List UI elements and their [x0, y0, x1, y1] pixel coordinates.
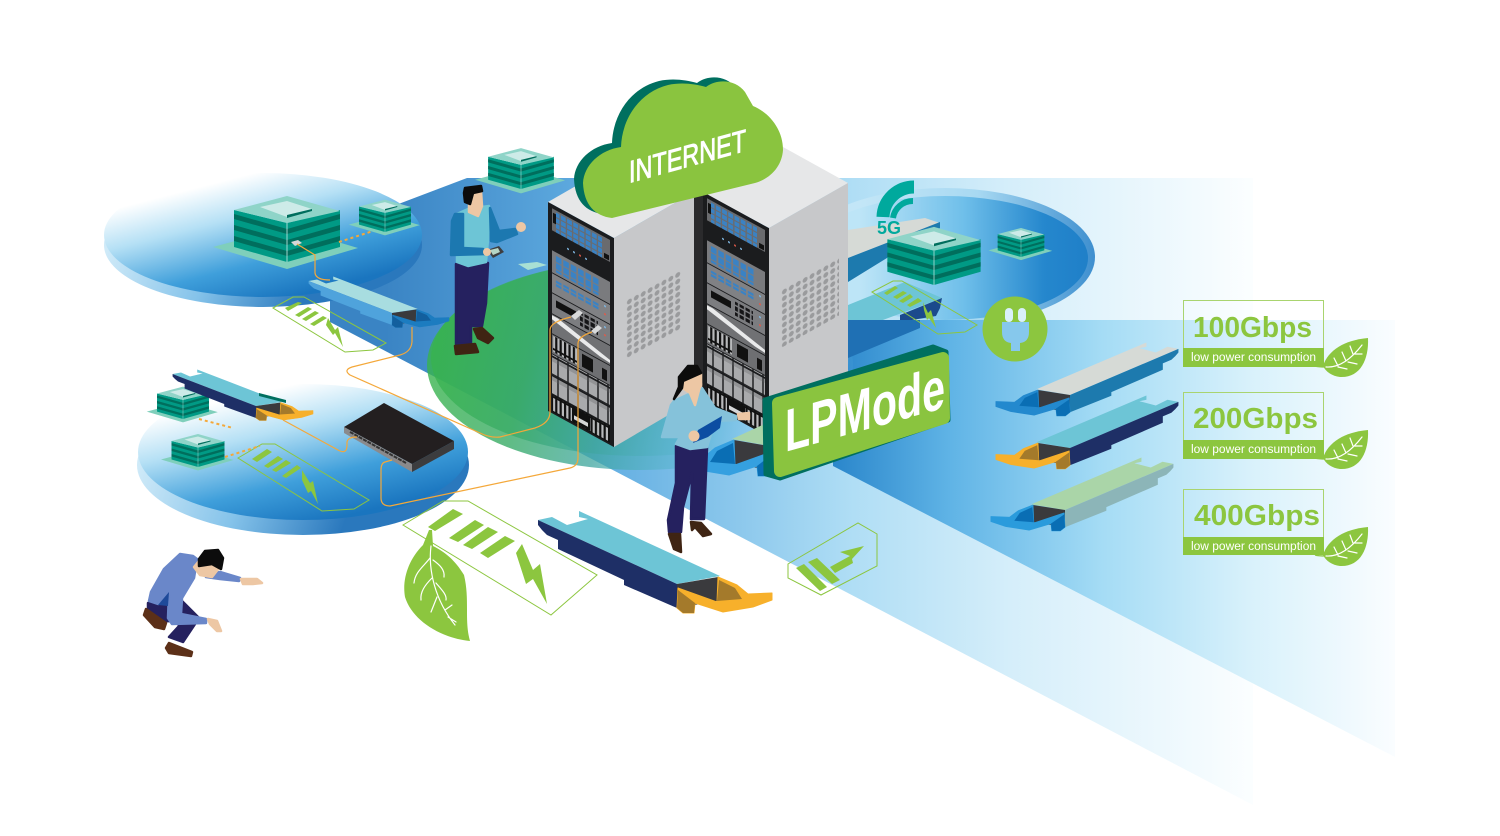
building: lower-left lower — [161, 434, 234, 470]
person: man with phone — [451, 186, 526, 354]
speed label: 100Gbps — [1183, 300, 1368, 377]
speed label: 100Gbps: 100Gbps — [1193, 312, 1312, 344]
server rack: right — [703, 147, 848, 437]
cloud with INTERNET label: INTERNET — [629, 122, 746, 190]
icon: low power tag, 5G area — [872, 281, 977, 334]
icon: low power tag, centre small — [788, 523, 877, 595]
building: lower-left upper — [147, 387, 218, 422]
building: above central disc — [475, 148, 565, 193]
small device plate — [518, 262, 547, 270]
fibre cables — [199, 231, 602, 506]
icon: low power tag, top-left — [273, 297, 386, 352]
cloud with INTERNET label — [574, 77, 783, 218]
building: right small — [988, 228, 1052, 260]
light beam: back panel — [330, 178, 1253, 805]
platform: central green disc — [427, 260, 853, 470]
strip on gold transceiver — [259, 393, 286, 403]
speed label: 400Gbps: low power consumption — [1191, 541, 1316, 553]
building: right large — [887, 227, 981, 285]
platform: top-left office disc — [104, 173, 422, 307]
building: top-left small — [349, 200, 420, 235]
icon: power plug — [982, 296, 1048, 362]
transceiver: 100Gbps — [996, 342, 1178, 416]
platform: right 5G disc — [795, 188, 1095, 326]
icon: low power tag, centre large — [403, 501, 597, 615]
light beam: front panel — [833, 320, 1395, 757]
transceiver behind 5G building — [848, 218, 942, 358]
network switch — [344, 403, 454, 472]
LPMode sign — [765, 347, 948, 478]
transceiver: 200Gbps — [996, 395, 1178, 469]
LPMode sign: LPMode — [785, 354, 945, 465]
icon: low power tag, lower-left — [238, 444, 369, 511]
speed label: 400Gbps — [1183, 490, 1368, 566]
transceiver: top-left light blue — [309, 276, 449, 328]
building: top-left large — [213, 196, 358, 269]
person: woman with tablet — [662, 366, 749, 552]
icon: 5G signal: 5G — [877, 218, 901, 238]
server rack: left — [548, 156, 704, 447]
icon: large leaf — [404, 530, 470, 641]
transceiver: centre large gold — [538, 511, 772, 613]
transceiver: 400Gbps — [991, 457, 1173, 531]
platform: lower-left office disc — [137, 384, 469, 535]
person: crouching man — [144, 550, 262, 656]
speed label: 100Gbps: low power consumption — [1191, 352, 1316, 364]
speed label: 200Gbps: 200Gbps — [1193, 403, 1318, 435]
speed label: 200Gbps — [1183, 392, 1368, 469]
transceiver: lower-left gold — [173, 370, 313, 420]
speed label: 200Gbps: low power consumption — [1191, 444, 1316, 456]
speed label: 400Gbps: 400Gbps — [1194, 500, 1320, 532]
transceiver: behind LPMode — [680, 374, 914, 476]
connector on building — [291, 240, 302, 246]
icon: 5G signal — [877, 187, 914, 238]
